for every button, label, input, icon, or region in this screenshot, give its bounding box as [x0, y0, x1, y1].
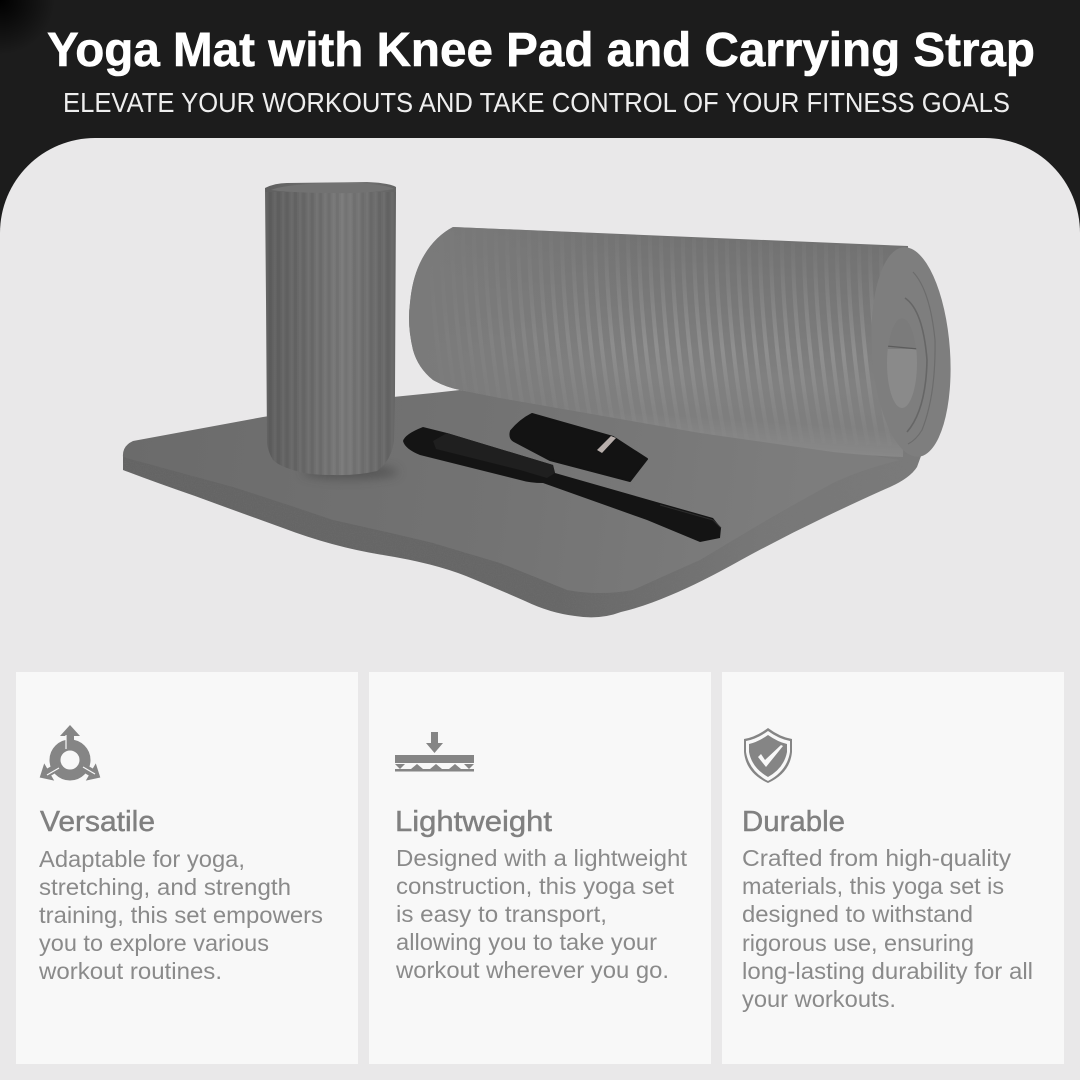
body: durable: long-lasting durability for all	[742, 958, 1033, 984]
body: lightweight	[395, 845, 688, 983]
body: durable: Crafted from high-quality	[742, 845, 1012, 871]
body: durable: materials, this yoga set is	[742, 873, 1004, 899]
body: versatile: workout routines.	[38, 958, 222, 984]
icon: shield with check	[744, 728, 792, 783]
body: versatile: Adaptable for yoga,	[39, 846, 245, 872]
body: durable: designed to withstand	[742, 901, 973, 927]
card: lightweight	[369, 672, 711, 1064]
rib lines	[409, 227, 874, 404]
knee pad cylinder	[265, 182, 396, 475]
front strap	[403, 427, 721, 542]
knee pad shadow	[302, 465, 398, 479]
flat mat	[123, 390, 925, 617]
roll hole	[887, 346, 917, 408]
body: durable: your workouts.	[742, 986, 896, 1012]
heading: durable: Durable	[742, 806, 845, 838]
icon: arrow pressing on layer	[395, 732, 474, 772]
body: lightweight: construction, this yoga set	[396, 873, 675, 899]
product: yoga mat set	[123, 182, 957, 617]
icon: three-way arrows	[35, 725, 105, 786]
body: versatile	[38, 846, 323, 984]
rolled mat	[405, 220, 957, 459]
body: lightweight: allowing you to take your	[396, 929, 657, 955]
body: lightweight: is easy to transport,	[396, 901, 607, 927]
body: lightweight: workout wherever you go.	[395, 957, 669, 983]
body: versatile: training, this set empowers	[39, 902, 323, 928]
card: durable	[722, 672, 1064, 1064]
body: versatile: stretching, and strength	[39, 874, 291, 900]
body: lightweight: Designed with a lightweight	[396, 845, 688, 871]
header background	[0, 0, 1080, 300]
subtitle: ELEVATE YOUR WORKOUTS AND TAKE CONTROL OF YOUR FITNESS GOALS	[63, 87, 1010, 118]
back strap	[510, 414, 647, 481]
body: durable: rigorous use, ensuring	[742, 930, 974, 956]
roll end cap	[865, 245, 957, 459]
body: durable	[742, 845, 1033, 1012]
heading: lightweight: Lightweight	[395, 806, 552, 838]
heading: versatile: Versatile	[40, 806, 155, 838]
body: versatile: you to explore various	[39, 930, 269, 956]
title: Yoga Mat with Knee Pad and Carrying Strap	[47, 24, 1035, 77]
card: versatile	[16, 672, 358, 1064]
